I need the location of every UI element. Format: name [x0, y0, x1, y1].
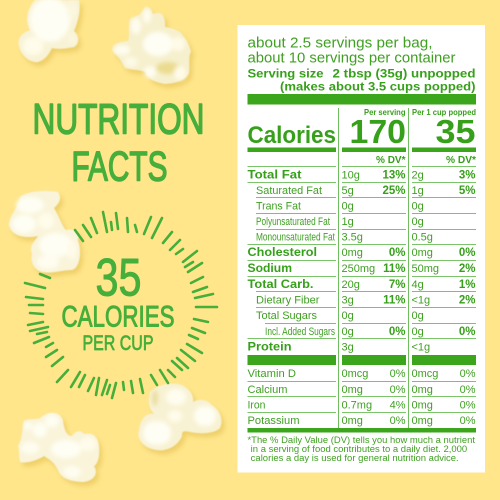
per cup values: 0mg [412, 400, 433, 412]
per serving values: 11% [383, 263, 406, 275]
per serving values: 0mcg [342, 368, 368, 380]
nutrient labels: Trans Fat [256, 200, 301, 212]
heading: nutrition facts: NUTRITION [32, 96, 204, 144]
panel: nutrition facts table [238, 25, 485, 472]
heading: nutrition facts: FACTS [72, 142, 168, 190]
nutrient labels: Vitamin D [248, 368, 296, 380]
per serving values: 0mg [342, 247, 363, 259]
nutrient labels: Monounsaturated Fat [256, 232, 335, 244]
per cup values: 0mg [412, 247, 433, 259]
per serving values: 0% [389, 247, 406, 259]
footnote [248, 435, 476, 463]
per cup values: 2g [412, 170, 424, 182]
per cup values: 4g [412, 279, 424, 291]
per serving values: 0.7mg [342, 400, 372, 412]
nutrient labels: Dietary Fiber [256, 294, 320, 306]
per cup values: 0% [460, 368, 476, 380]
per serving values: 20g [342, 279, 360, 291]
per serving values: 3.5g [342, 232, 363, 244]
per cup values: 0g [412, 310, 424, 322]
nutrient labels: Potassium [248, 415, 300, 427]
bar: top divider [248, 94, 476, 104]
callout: 35 calories per cup: PER CUP [82, 332, 154, 355]
text block: serving size [248, 68, 476, 94]
callout: 35 calories per cup [62, 248, 174, 355]
per serving values: 0g [342, 310, 354, 322]
per cup values: 2% [459, 263, 476, 275]
per serving values: 25% [382, 185, 406, 197]
per cup values: <1g [412, 294, 430, 306]
per serving values: 5g [342, 185, 354, 197]
per cup values: 0mcg [412, 368, 438, 380]
per serving values [342, 170, 406, 427]
nutrient labels: Total Sugars [256, 310, 317, 322]
per serving values: 0mg [342, 415, 363, 427]
per serving values: 13% [382, 170, 406, 182]
bars: protein divider [248, 355, 476, 365]
calories row: % DV* [446, 155, 476, 166]
per serving values: 0g [342, 326, 354, 338]
per cup values: 1% [459, 279, 476, 291]
per serving values: 0% [389, 326, 406, 338]
nutrient labels: Protein [248, 342, 292, 354]
per serving values: 11% [383, 294, 406, 306]
per cup values [412, 170, 476, 427]
nutrient labels [248, 170, 335, 427]
per serving values: 3g [342, 294, 354, 306]
per cup values: 50mg [412, 263, 439, 275]
nutrient labels: Total Fat [248, 170, 302, 182]
footnote: in a serving of food contributes to a daily diet. 2,000 [251, 444, 467, 454]
nutrient labels: Polyunsaturated Fat [256, 216, 330, 228]
per serving values: 0% [390, 384, 406, 396]
bar: bottom divider [248, 428, 476, 432]
calories row: % DV* [376, 155, 406, 166]
nutrient labels: Incl. Added Sugars [265, 326, 335, 338]
per cup values: 2% [459, 294, 476, 306]
per cup values: 5% [459, 185, 476, 197]
per cup values: 0.5g [412, 232, 433, 244]
calories row: Calories [248, 122, 336, 149]
text block: servings: about 10 servings per container [248, 50, 456, 66]
footnote: *The % Daily Value (DV) tells you how much a nutrient [248, 435, 476, 445]
text block: servings [248, 36, 456, 66]
per cup values: 0% [459, 326, 476, 338]
popcorn: bottom left [18, 413, 102, 486]
per cup values: 0g [412, 216, 424, 228]
per cup values: 0% [460, 400, 476, 412]
per cup values: <1g [412, 342, 430, 354]
text block: serving size: Serving size [248, 68, 324, 80]
nutrient labels: Cholesterol [248, 247, 317, 259]
calories row: Per serving [364, 107, 406, 117]
per serving values: 0mg [342, 384, 363, 396]
per serving values: 0% [390, 368, 406, 380]
popcorn: middle left [9, 191, 83, 277]
per serving values: 10g [342, 170, 360, 182]
text block: serving size: (makes about 3.5 cups popped) [280, 82, 476, 94]
popcorn: top right [113, 7, 194, 88]
per serving values: 4% [390, 400, 406, 412]
footnote: calories a day is used for general nutrition advice. [251, 453, 459, 463]
table rules [248, 108, 476, 428]
nutrient labels: Iron [248, 400, 266, 412]
nutrient labels: Sodium [248, 263, 292, 275]
calories row [248, 107, 476, 166]
per serving values: 7% [389, 279, 406, 291]
per serving values: 0% [390, 415, 406, 427]
calories row: 170 [350, 113, 406, 150]
per cup values: 0g [412, 200, 424, 212]
text block: servings: about 2.5 servings per bag, [248, 36, 432, 52]
per cup values: 0% [460, 415, 476, 427]
popcorn: bottom right [138, 384, 225, 454]
per cup values: 0mg [412, 384, 433, 396]
callout: 35 calories per cup: 35 [96, 248, 142, 308]
text block: serving size: 2 tbsp (35g) unpopped [332, 68, 476, 80]
per cup values: 0g [412, 326, 424, 338]
per cup values: 0mg [412, 415, 433, 427]
heading: nutrition facts [32, 96, 204, 190]
nutrient labels: Calcium [248, 384, 288, 396]
per cup values: 1g [412, 185, 424, 197]
nutrient labels: Total Carb. [248, 279, 314, 291]
popcorn: top left [19, 0, 83, 66]
per serving values: 250mg [342, 263, 375, 275]
per cup values: 3% [459, 170, 476, 182]
calories row: Per 1 cup popped [412, 107, 476, 117]
per cup values: 0% [460, 384, 476, 396]
per serving values: 0g [342, 200, 354, 212]
per serving values: 3g [342, 342, 354, 354]
icon: radiating ticks around callout [25, 212, 217, 398]
calories row: 35 [436, 113, 476, 150]
callout: 35 calories per cup: CALORIES [62, 300, 174, 334]
per serving values: 1g [342, 216, 354, 228]
per cup values: 0% [459, 247, 476, 259]
nutrient labels: Saturated Fat [256, 185, 322, 197]
